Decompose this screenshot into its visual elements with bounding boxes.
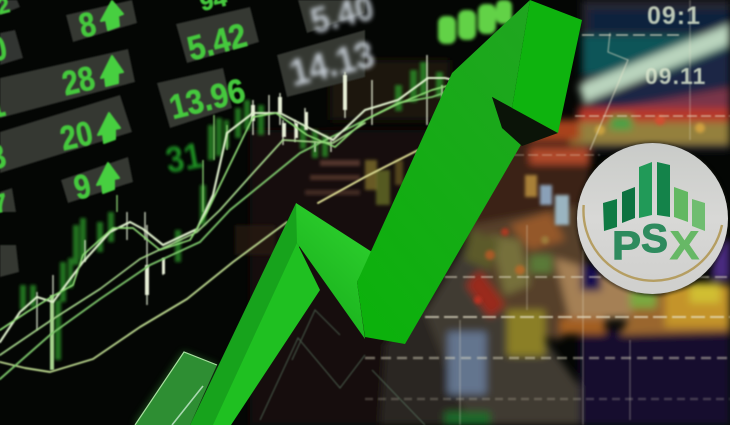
arrow main shaft bbox=[357, 0, 530, 344]
ticker values: 9 bbox=[70, 166, 95, 207]
logo wordmark PSX: X bbox=[670, 224, 699, 268]
icons: green up arrows bbox=[97, 1, 123, 193]
clock readings: 09:1 bbox=[647, 2, 701, 30]
logo wordmark PSX bbox=[612, 217, 699, 268]
icon: small background arrow bbox=[133, 351, 218, 425]
candlesticks bbox=[37, 55, 447, 370]
logo: PSX coin bbox=[576, 142, 730, 296]
ticker values: white unfocused bbox=[285, 0, 379, 95]
ticker values: white unfocused: 14.13 bbox=[285, 32, 379, 95]
background: blurred supermarket shelves bbox=[235, 0, 730, 425]
logo wordmark PSX: S bbox=[641, 217, 668, 261]
coin gold ring bbox=[583, 205, 722, 281]
ticker values bbox=[0, 0, 251, 219]
icon: large green rising arrow bbox=[190, 0, 582, 425]
arrow lower rising segment bbox=[190, 203, 300, 425]
candlestick glow: green clusters bbox=[20, 62, 443, 360]
ticker values: 28 bbox=[58, 58, 98, 103]
chart: moving average lines bbox=[0, 78, 465, 379]
ticker values: 5.42 bbox=[183, 16, 251, 68]
chart: dim lines in lower centre bbox=[260, 310, 425, 425]
arrow descending segment bbox=[296, 203, 372, 339]
ticker panel: board cells bbox=[0, 0, 365, 277]
arrow lower rising bright face bbox=[213, 243, 320, 425]
logo bars bbox=[603, 162, 705, 231]
arrow head shadow bbox=[492, 97, 558, 146]
clock readings: 09.11 bbox=[645, 63, 706, 89]
arrow head right face bbox=[512, 0, 582, 133]
ticker values: 8 bbox=[75, 4, 100, 45]
logo wordmark PSX: P bbox=[612, 224, 641, 268]
ticker value: unfocused 31: 31 bbox=[163, 136, 205, 181]
clock readings bbox=[645, 2, 706, 89]
ticker values: 20 bbox=[56, 113, 96, 158]
chart grid: dashed price lines on the right bbox=[365, 0, 730, 425]
ticker values: 13.96 bbox=[165, 71, 249, 126]
candlestick blurred highlights near the top bbox=[438, 0, 512, 44]
